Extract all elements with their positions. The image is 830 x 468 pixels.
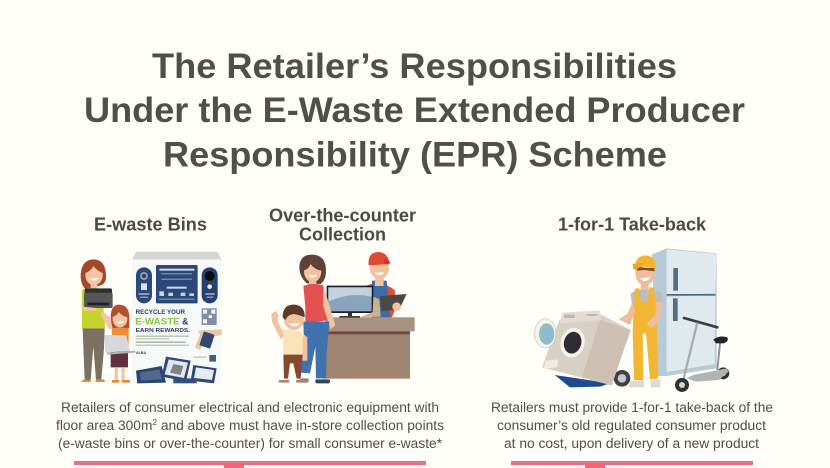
title: Under the E-Waste Extended Producer (84, 91, 745, 130)
text block: e-waste bin requirement (56, 400, 444, 452)
bin poster text: & (182, 316, 189, 326)
text block: take-back requirement: at no cost, upon delivery of a new product (504, 436, 759, 452)
discarded devices (162, 357, 191, 382)
icon: collection bin (132, 252, 222, 383)
connector: left pink bracket (74, 461, 426, 468)
icon: counter (323, 317, 415, 379)
heading: Over-the-counter Collection: Over-the-counter (269, 206, 416, 226)
title: The Retailer’s Responsibilities (152, 47, 677, 86)
text block: e-waste bin requirement: Retailers of consumer electrical and electronic equipment with (61, 400, 439, 416)
text block: e-waste bin requirement: floor area 300m (56, 418, 155, 434)
icon: washing machine (535, 311, 631, 387)
text block: e-waste bin requirement: 2 (152, 417, 157, 427)
heading: Over-the-counter Collection: Collection (299, 224, 386, 244)
icon: waving boy (271, 305, 308, 383)
icon: girl with laptop (101, 305, 135, 383)
title (84, 47, 745, 174)
icon: electric scooter (675, 318, 729, 392)
icon: woman in red top (299, 255, 335, 383)
illustration: e-waste bin with woman and girl (81, 252, 222, 383)
heading: 1-for-1 Take-back: 1-for-1 Take-back (558, 214, 707, 234)
text block: e-waste bin requirement: and above must have in-store collection points (157, 418, 444, 434)
text block: take-back requirement: Retailers must provide 1-for-1 take-back of the (491, 400, 773, 416)
icon: staff member in red cap (361, 252, 407, 317)
title: Responsibility (EPR) Scheme (163, 136, 667, 174)
icon: woman holding printer (81, 259, 113, 382)
text block: take-back requirement (491, 400, 773, 452)
illustration: over-the-counter collection (271, 252, 415, 383)
text block: take-back requirement: consumer’s old regulated consumer product (497, 418, 766, 434)
connector: right pink bracket (511, 461, 753, 468)
heading: Over-the-counter Collection (269, 206, 416, 244)
icon: refrigerator (652, 248, 717, 376)
bin poster text: RECYCLE YOUR (136, 309, 186, 316)
bin poster text (135, 309, 190, 334)
heading: E-waste Bins: E-waste Bins (94, 214, 207, 234)
icon: delivery worker in yellow (619, 255, 663, 387)
icon: collection bin: ALBA (136, 351, 147, 355)
icon: hand truck wheel (614, 370, 630, 387)
bin poster text: E-WASTE (135, 316, 180, 326)
icon: computer monitor (327, 286, 381, 318)
text block: e-waste bin requirement: (e-waste bins or over-the-counter) for small consumer e-waste* (58, 436, 442, 452)
QR code (202, 308, 217, 325)
illustration: 1-for-1 take-back (535, 248, 729, 392)
bin poster text: EARN REWARDS. (136, 328, 190, 334)
